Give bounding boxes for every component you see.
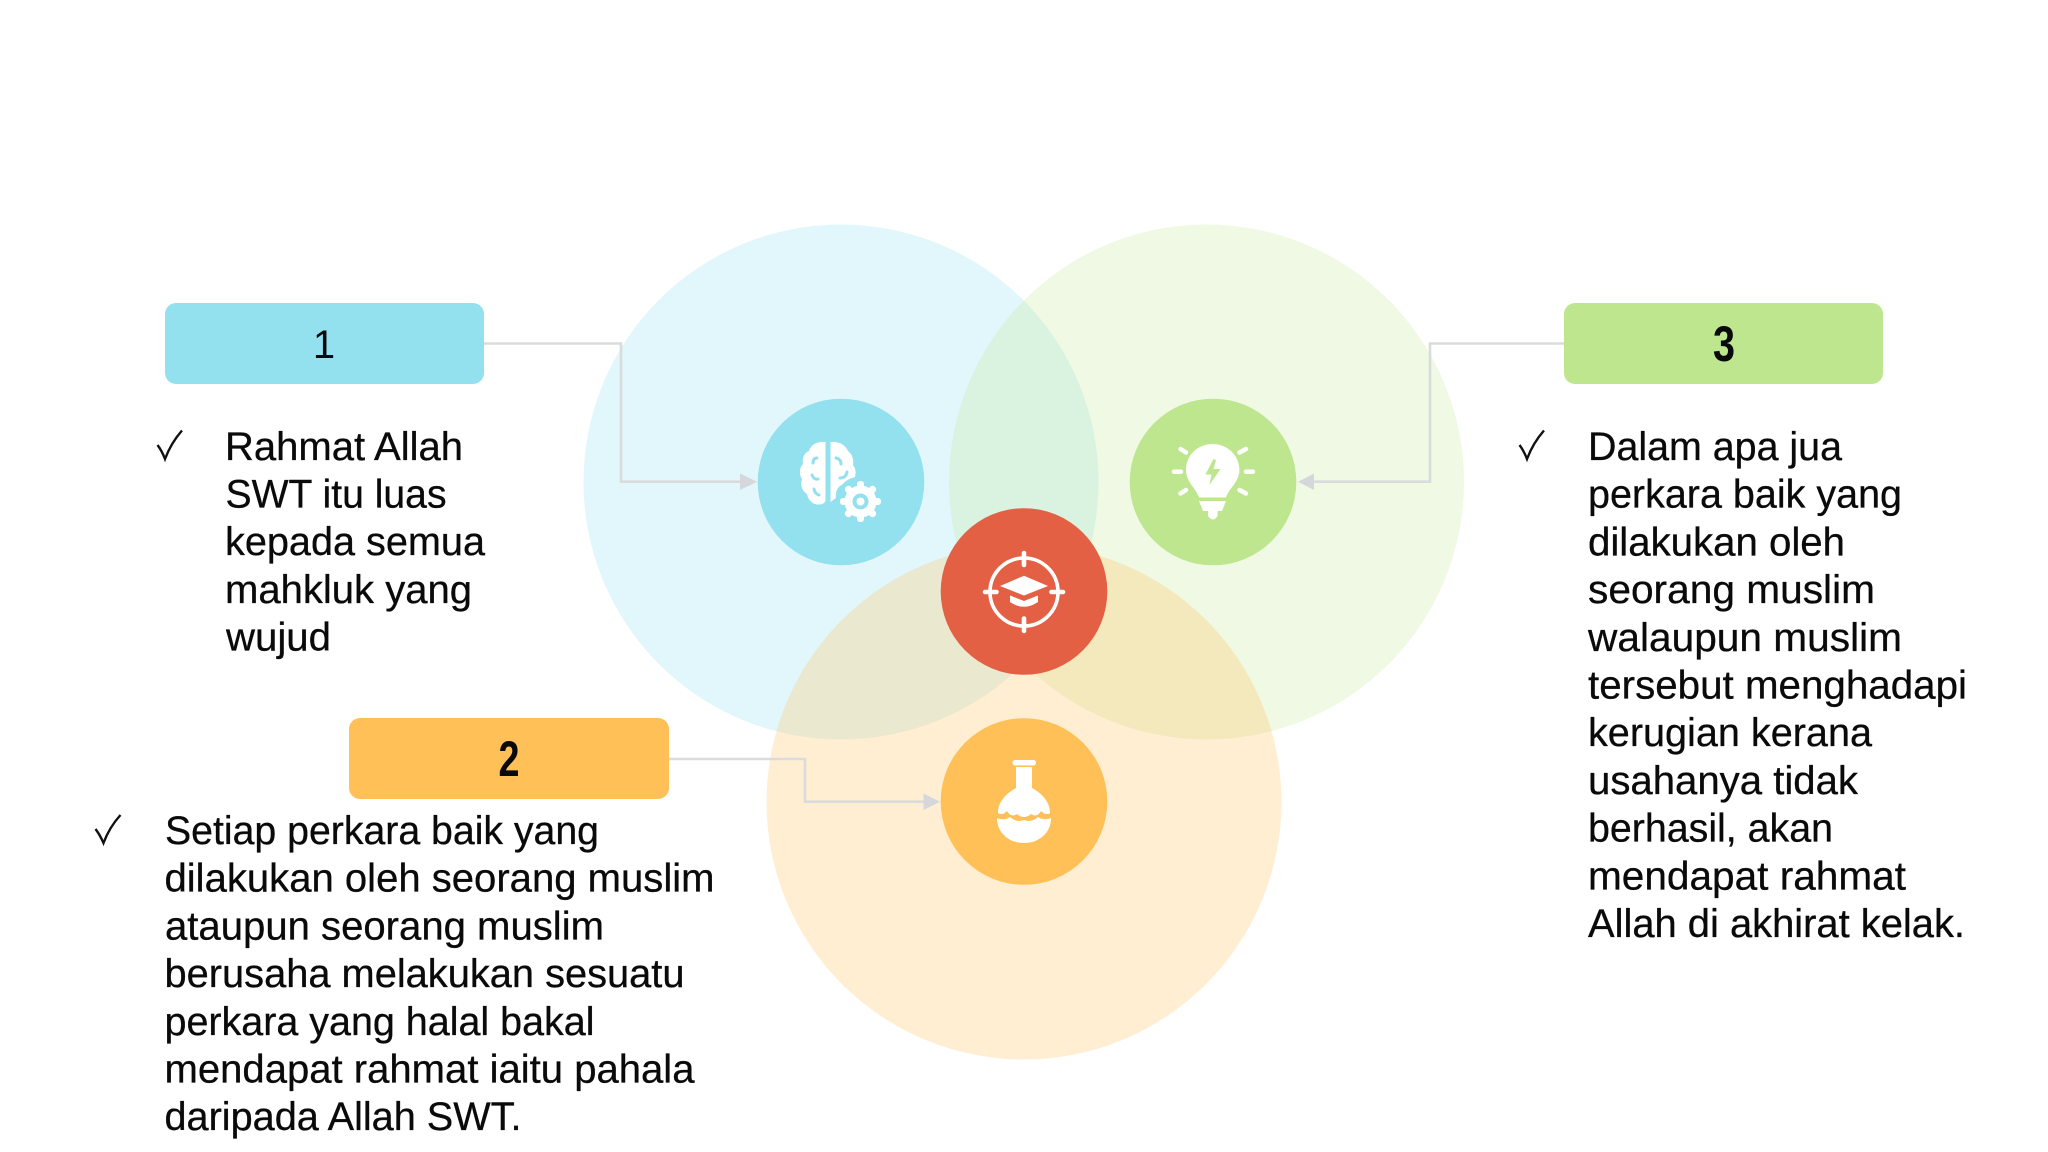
label box 1	[165, 303, 484, 384]
check mark 3	[1520, 430, 1544, 459]
text block 2: dilakukan oleh seorang muslim	[164, 857, 714, 901]
node: orange circle with flask icon	[941, 718, 1107, 885]
label box 1: 1	[313, 323, 335, 367]
large circle: orange	[766, 544, 1282, 1060]
text block 3: tersebut menghadapi	[1588, 664, 1967, 708]
text block 3: mendapat rahmat	[1588, 854, 1906, 898]
node: central red circle with graduation target icon	[941, 508, 1107, 675]
text block 1: Rahmat Allah	[225, 425, 463, 469]
text block 2: perkara yang halal bakal	[164, 1000, 594, 1044]
connector: box 2 to orange circle	[668, 759, 940, 810]
panel: item 3	[1520, 303, 1967, 946]
text block 3: kerugian kerana	[1588, 711, 1873, 755]
text block 1: SWT itu luas	[226, 473, 446, 517]
icon: graduation cap in target	[985, 553, 1063, 631]
text block 3: perkara baik yang	[1588, 473, 1902, 517]
connector: box 3 to green circle	[1298, 344, 1564, 490]
label box 3	[1564, 303, 1883, 384]
text block 3: Allah di akhirat kelak.	[1588, 902, 1965, 946]
text block 3: Dalam apa jua	[1588, 425, 1843, 469]
node: blue circle with brain and gear icon	[758, 399, 924, 565]
text block 3: usahanya tidak	[1588, 759, 1859, 803]
text block 3: walaupun muslim	[1587, 616, 1902, 660]
check mark 1	[158, 430, 182, 459]
text block 2: berusaha melakukan sesuatu	[164, 952, 684, 996]
text block 3: berhasil, akan	[1588, 807, 1833, 851]
icon: light bulb	[1174, 444, 1253, 520]
connector: box 1 to blue circle	[484, 344, 757, 490]
text block 2	[164, 809, 714, 1139]
large circle: blue	[584, 224, 1098, 740]
venn diagram large circles	[584, 224, 1464, 1060]
text block 3: seorang muslim	[1588, 568, 1875, 612]
text block 2: Setiap perkara baik yang	[165, 809, 599, 853]
text block 1: wujud	[225, 615, 331, 659]
text block 2: ataupun seorang muslim	[165, 904, 604, 948]
text block 2: daripada Allah SWT.	[164, 1095, 522, 1139]
label box 2: 2	[498, 731, 520, 787]
text block 3	[1587, 425, 1967, 946]
large circle: green	[949, 224, 1464, 740]
text block 1: mahkluk yang	[225, 568, 472, 612]
text block 1	[225, 425, 486, 659]
label box 3: 3	[1713, 316, 1735, 372]
icon: flask	[997, 760, 1051, 843]
icon: brain and gear	[800, 442, 886, 526]
panel: item 2	[96, 718, 714, 1139]
label box 2	[349, 718, 669, 799]
panel: item 1	[158, 303, 486, 659]
text block 2: mendapat rahmat iaitu pahala	[164, 1048, 695, 1092]
text block 1: kepada semua	[225, 520, 486, 564]
check mark 2	[96, 815, 120, 843]
text block 3: dilakukan oleh	[1588, 520, 1845, 564]
node: green circle with light bulb icon	[1130, 399, 1296, 565]
